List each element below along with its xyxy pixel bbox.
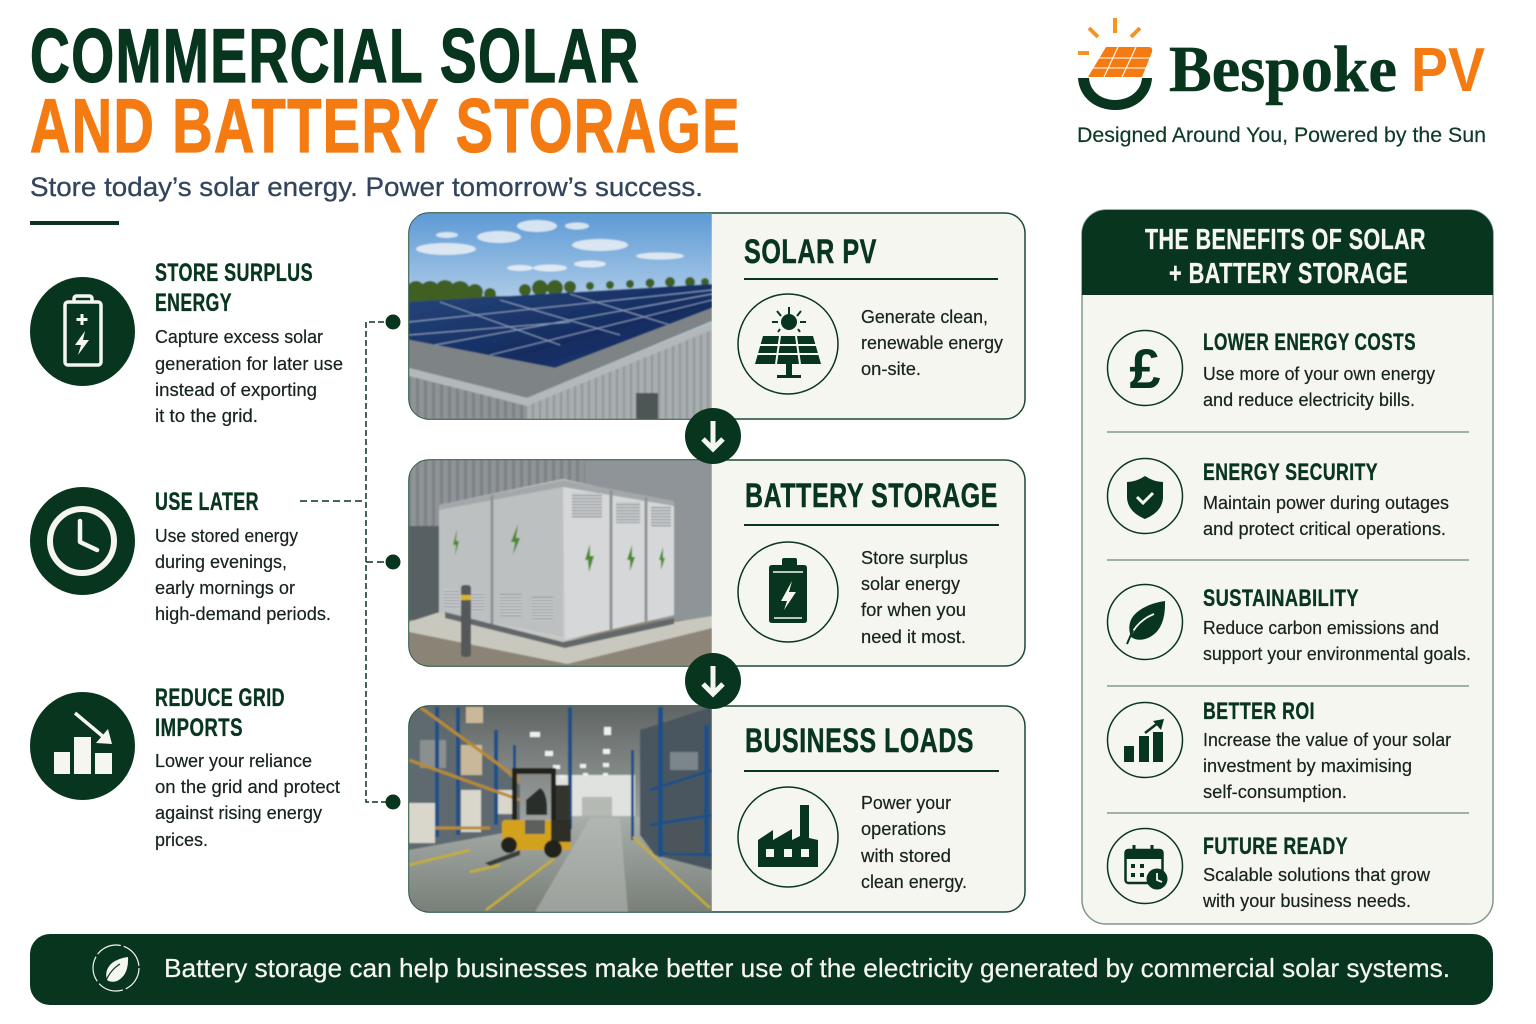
arrow: solar to battery	[685, 408, 741, 464]
panel: reduce grid imports	[30, 684, 340, 850]
text block: Lower your reliance	[155, 751, 312, 771]
heading: USE LATER	[155, 488, 259, 516]
text block: solar energy	[861, 574, 960, 594]
text block: Power your	[861, 793, 951, 813]
icon: shield	[1108, 458, 1182, 534]
heading: IMPORTS	[155, 714, 243, 742]
icon: rising chart	[1108, 702, 1182, 778]
benefit text: and reduce electricity bills.	[1203, 390, 1415, 410]
text block: Generate clean,	[861, 307, 988, 327]
benefit text: SUSTAINABILITY	[1203, 585, 1359, 612]
logo	[1077, 18, 1486, 147]
benefit text	[1203, 585, 1471, 664]
icon: solar panel	[738, 294, 838, 394]
right racks	[640, 707, 712, 870]
benefit: sustainability	[1108, 584, 1471, 664]
benefits header	[1082, 210, 1493, 295]
text block: renewable energy	[861, 333, 1003, 353]
icon: leaf	[1108, 584, 1182, 660]
icon: clock	[30, 487, 135, 595]
text block	[860, 793, 967, 892]
icon: pound	[1108, 330, 1182, 406]
heading: BUSINESS LOADS	[745, 722, 974, 760]
benefit text: and protect critical operations.	[1203, 519, 1446, 539]
benefit text	[1203, 698, 1451, 802]
icon: pound: £	[1129, 337, 1161, 400]
benefit text: Scalable solutions that grow	[1203, 865, 1431, 885]
benefit text: support your environmental goals.	[1203, 644, 1471, 664]
title	[30, 14, 741, 169]
heading: SOLAR PV	[744, 233, 877, 271]
benefit text: self-consumption.	[1203, 782, 1347, 802]
text block: early mornings or	[155, 578, 295, 598]
photo: battery cabinets	[409, 460, 712, 666]
photo: rooftop solar panels	[407, 213, 712, 419]
text block: clean energy.	[861, 872, 967, 892]
text block: Use stored energy	[155, 526, 298, 546]
heading: ENERGY	[155, 289, 232, 317]
banner	[30, 934, 1493, 1005]
icon: logo sun and panel	[1078, 18, 1152, 110]
photo: warehouse with forklift	[409, 706, 712, 912]
text block: it to the grid.	[155, 406, 258, 426]
panel: store surplus energy	[30, 259, 343, 426]
text block: operations	[861, 819, 946, 839]
icon: falling bars	[30, 692, 135, 800]
heading: STORE SURPLUS	[155, 259, 313, 287]
connector lines	[300, 314, 400, 810]
text block	[861, 307, 1003, 379]
icon: factory	[738, 787, 838, 887]
text block: need it most.	[861, 627, 966, 647]
benefits header: + BATTERY STORAGE	[1169, 258, 1408, 290]
logo tagline: Designed Around You, Powered by the Sun	[1077, 124, 1486, 147]
text block: during evenings,	[155, 552, 287, 572]
icon: battery	[30, 277, 135, 386]
left racks	[409, 707, 520, 850]
text block	[155, 751, 340, 850]
icon: battery	[738, 542, 838, 642]
heading	[155, 259, 313, 317]
benefit: lower energy costs	[1108, 329, 1435, 410]
forklift	[485, 768, 571, 866]
benefits header: THE BENEFITS OF SOLAR	[1145, 224, 1426, 256]
text block	[155, 327, 343, 426]
text block: Capture excess solar	[155, 327, 323, 347]
heading: BATTERY STORAGE	[745, 477, 998, 515]
text block: on-site.	[861, 359, 921, 379]
text block: high-demand periods.	[155, 604, 331, 624]
benefit: energy security	[1108, 458, 1449, 539]
text block	[861, 548, 968, 647]
text block: instead of exporting	[155, 380, 317, 400]
text block: prices.	[155, 830, 208, 850]
title: AND BATTERY STORAGE	[30, 84, 741, 169]
text block: with stored	[860, 846, 951, 866]
benefit text: Increase the value of your solar	[1203, 730, 1451, 750]
text block: for when you	[861, 600, 966, 620]
benefit text: LOWER ENERGY COSTS	[1203, 329, 1416, 356]
benefit text: with your business needs.	[1202, 891, 1411, 911]
text block: generation for later use	[155, 354, 343, 374]
panel: benefits	[1082, 210, 1493, 924]
logo wordmark: PV	[1411, 36, 1485, 105]
floor lines	[409, 837, 710, 910]
title: COMMERCIAL SOLAR	[30, 14, 640, 99]
subtitle: Store today’s solar energy. Power tomorrow’s success.	[30, 172, 703, 202]
arrow: battery to loads	[685, 653, 741, 709]
benefit text	[1203, 459, 1449, 539]
logo wordmark: Bespoke	[1169, 33, 1397, 106]
benefit text: Use more of your own energy	[1203, 364, 1435, 384]
text block	[155, 526, 331, 624]
panel: business loads	[409, 706, 1025, 912]
text block: Store surplus	[861, 548, 968, 568]
benefit text: BETTER ROI	[1203, 698, 1315, 725]
benefit text: ENERGY SECURITY	[1203, 459, 1378, 486]
icon: leaf badge	[93, 945, 139, 991]
benefit: better roi	[1108, 698, 1451, 802]
benefit: future ready	[1108, 828, 1431, 911]
benefit text	[1202, 833, 1431, 911]
panel: use later	[30, 487, 331, 624]
panel: solar pv	[407, 213, 1025, 419]
benefit text: Maintain power during outages	[1203, 493, 1449, 513]
text block: against rising energy	[155, 803, 322, 823]
benefit text: Reduce carbon emissions and	[1203, 618, 1439, 638]
text block: on the grid and protect	[155, 777, 340, 797]
benefit text	[1203, 329, 1435, 410]
benefit text: investment by maximising	[1203, 756, 1412, 776]
heading	[155, 684, 285, 742]
heading: REDUCE GRID	[155, 684, 285, 712]
icon: calendar clock	[1108, 828, 1182, 904]
benefit text: FUTURE READY	[1203, 833, 1348, 860]
banner text: Battery storage can help businesses make better use of the electricity generated by commercial solar systems.	[164, 953, 1450, 983]
panel: battery storage	[409, 460, 1025, 666]
